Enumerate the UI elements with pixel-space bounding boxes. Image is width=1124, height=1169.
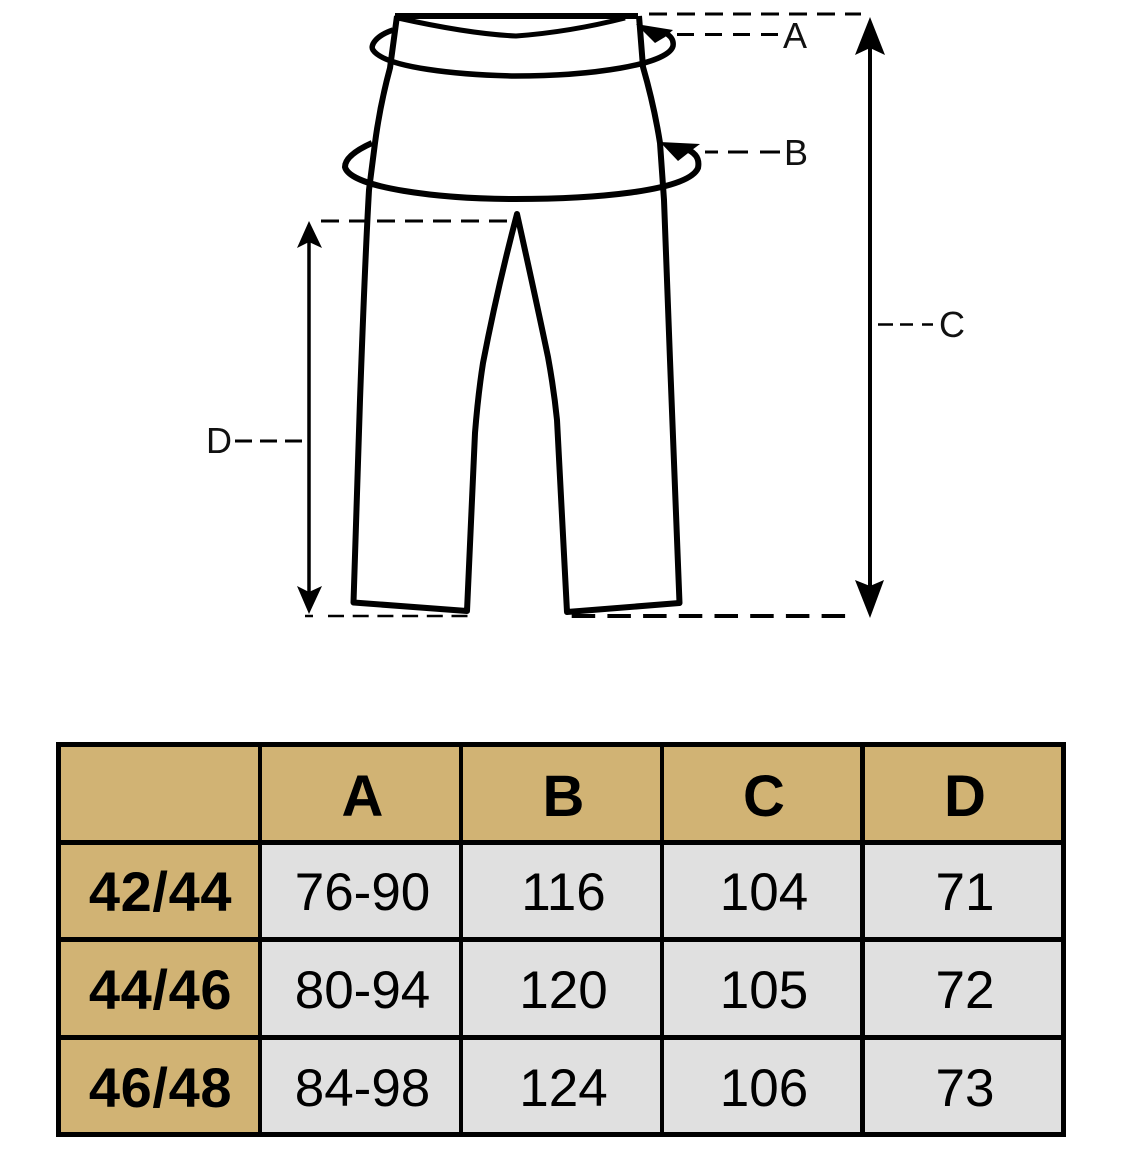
row 44/46: 120 xyxy=(519,961,608,1020)
trousers outline xyxy=(354,16,680,612)
row 46/48: 124 xyxy=(519,1059,608,1118)
label A: A xyxy=(783,15,807,56)
label B: B xyxy=(784,132,808,173)
row 46/48: 84-98 xyxy=(295,1059,430,1118)
waist loop A xyxy=(372,24,673,76)
label C: C xyxy=(939,304,965,345)
row 46/48: 106 xyxy=(720,1059,808,1118)
header row xyxy=(61,747,1061,840)
hip loop B xyxy=(345,142,700,199)
label D: D xyxy=(206,420,232,461)
row 42/44: 42/44 xyxy=(89,860,232,923)
row 42/44: 71 xyxy=(936,863,994,922)
row 44/46: 44/46 xyxy=(89,958,232,1021)
row 42/44: 116 xyxy=(521,863,606,922)
header row: B xyxy=(543,764,584,829)
row 46/48: 73 xyxy=(936,1059,994,1118)
header row: D xyxy=(944,764,986,829)
dashed guide lines xyxy=(235,14,933,616)
arrow D xyxy=(297,221,322,614)
row 44/46: 72 xyxy=(936,961,994,1020)
row 42/44: 76-90 xyxy=(295,863,430,922)
header row: C xyxy=(743,764,785,829)
row 42/44: 104 xyxy=(720,863,808,922)
arrow C xyxy=(855,17,885,618)
row 46/48 xyxy=(61,1040,1061,1132)
row 46/48: 46/48 xyxy=(89,1056,232,1119)
row 44/46 xyxy=(61,942,1061,1035)
diagram: trousers with measurements xyxy=(206,12,965,618)
header row: A xyxy=(342,764,383,829)
row 42/44 xyxy=(61,845,1061,937)
size table xyxy=(56,742,1066,1137)
row 44/46: 105 xyxy=(720,961,808,1020)
row 44/46: 80-94 xyxy=(295,961,430,1020)
